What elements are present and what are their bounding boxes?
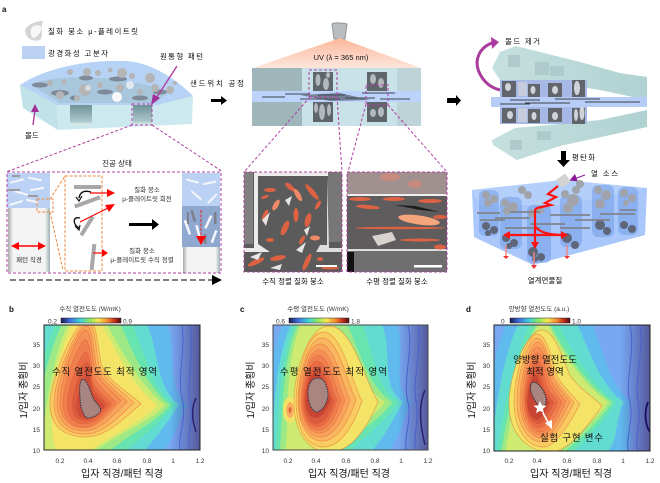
y ticks d: 15	[483, 427, 490, 434]
colorbar c: 1.8	[351, 318, 360, 326]
colorbar c: 수평 열전도도 (W/mK)	[287, 304, 349, 313]
colorbar c	[276, 304, 360, 326]
mold label: 몰드	[25, 131, 39, 140]
arrow: mold	[31, 104, 39, 125]
mold with polymer and particles	[20, 61, 193, 130]
contour map c	[272, 324, 428, 450]
sandwich label: 샌드위치 공정	[190, 78, 244, 88]
optimal region label b: 수직 열전도도 최적 영역	[52, 366, 157, 378]
x axis title d: 입자 직경/패턴 직경	[530, 467, 612, 480]
x ticks d: 1.2	[645, 458, 655, 465]
x ticks b: 1	[171, 458, 175, 465]
arrow: step one	[211, 96, 227, 105]
y ticks d	[483, 342, 490, 455]
panel label b: b	[9, 305, 14, 314]
y ticks b: 30	[33, 363, 40, 370]
pattern diameter arrow	[11, 242, 46, 250]
pattern highlight boxes	[309, 70, 388, 105]
rotation text: 질화 붕소	[134, 186, 160, 194]
micrograph: vertical alignment	[244, 172, 342, 272]
panel label d: d	[466, 305, 471, 314]
panel: UV curing sandwich	[252, 23, 421, 126]
x ticks d	[504, 458, 655, 465]
x axis title b: 입자 직경/패턴 직경	[81, 467, 163, 480]
y ticks b	[33, 342, 40, 455]
x ticks c: 1	[399, 458, 403, 465]
colorbar d: 0	[501, 318, 505, 326]
x ticks d: 0.2	[504, 458, 514, 465]
y ticks d: 30	[483, 363, 490, 370]
optimal region label d: 최적 영역	[526, 366, 564, 378]
uv cone	[253, 38, 421, 68]
optimal region label d: 양방향 열전도도	[513, 354, 577, 366]
arrow: flatten	[557, 151, 570, 167]
cylindrical pattern label: 원통형 패턴	[160, 51, 203, 61]
legend: photocurable polymer	[22, 46, 108, 59]
legend: boron nitride platelet	[25, 21, 138, 41]
x ticks b: 0.8	[142, 458, 152, 465]
y ticks c: 10	[262, 448, 269, 455]
legend: photocurable polymer: 광경화성 고분자	[48, 48, 108, 58]
rotation text	[122, 186, 172, 203]
colorbar d: 1.0	[572, 318, 581, 326]
optimal region label c: 수평 열전도도 최적 영역	[280, 366, 387, 378]
colorbar b: 0.9	[123, 318, 132, 326]
micrograph caption right: 수평 정렬 질화 붕소	[366, 276, 428, 286]
y ticks b: 20	[33, 406, 40, 413]
arrow: to pattern	[151, 66, 177, 105]
heat source block	[556, 173, 571, 188]
contour map d	[494, 324, 650, 452]
x ticks b: 0.2	[55, 458, 65, 465]
rotation text: μ-플레이트릿 회전	[122, 194, 172, 203]
y ticks d: 10	[483, 448, 490, 455]
y ticks b: 15	[33, 427, 40, 434]
red dashed down arrow	[196, 210, 206, 245]
optimal region label d	[513, 354, 577, 378]
x ticks c: 0.2	[283, 458, 293, 465]
y ticks b: 25	[33, 384, 40, 391]
x ticks d: 0.8	[592, 458, 602, 465]
y ticks b: 35	[33, 342, 40, 349]
heat flow red arrows	[505, 186, 565, 245]
heat source label: 열 소스	[591, 169, 618, 178]
colorbar d	[501, 304, 581, 326]
heat arrowheads	[503, 231, 568, 249]
y ticks c: 35	[262, 342, 269, 349]
colorbar c: 0.6	[276, 318, 285, 326]
contour map b	[44, 324, 200, 450]
panel: demolded stack	[491, 46, 647, 160]
mold removal label: 몰드 제거	[505, 37, 540, 46]
zoom lines to micrographs	[244, 97, 447, 172]
alignment text: 질화 붕소	[129, 247, 155, 255]
arrow: mold removal	[477, 37, 500, 90]
platelets	[74, 185, 101, 270]
y axis title c: 1/입자 종횡비	[244, 361, 257, 419]
arrow: experimental point	[543, 413, 552, 429]
panel label a: a	[2, 5, 7, 14]
vacuum label: 진공 상태	[102, 158, 132, 168]
TIM label: 열계면물질	[528, 275, 562, 285]
heat transfer down arrows	[503, 245, 570, 269]
y ticks d: 25	[483, 384, 490, 391]
mold block	[252, 68, 421, 126]
alignment text	[110, 247, 174, 264]
panel label c: c	[240, 305, 245, 314]
y ticks c: 15	[262, 427, 269, 434]
colorbar b	[48, 304, 132, 326]
x ticks c: 0.6	[341, 458, 351, 465]
panel: thermal interface material	[472, 173, 647, 269]
arrow: heat source	[569, 174, 585, 182]
micrograph: horizontal alignment	[347, 172, 447, 272]
colorbar b: 0.2	[48, 318, 57, 326]
x ticks c: 1.2	[423, 458, 433, 465]
alignment text: μ-플레이트릿 수직 정렬	[110, 255, 174, 264]
orange zoom boxes	[37, 176, 102, 271]
y ticks d: 35	[483, 342, 490, 349]
uv label: UV (λ = 365 nm)	[314, 53, 369, 62]
y axis title b: 1/입자 종횡비	[17, 361, 30, 419]
y ticks d: 20	[483, 406, 490, 413]
x ticks c: 0.8	[370, 458, 380, 465]
experimental label: 실험 구현 변수	[540, 433, 603, 444]
y ticks c: 30	[262, 363, 269, 370]
star marker	[534, 401, 546, 413]
x ticks b: 1.2	[195, 458, 205, 465]
rotation arrows	[74, 191, 91, 230]
colorbar d: 양방향 열전도도 (a.u.)	[509, 304, 569, 313]
micrograph caption left: 수직 정렬 질화 붕소	[262, 276, 324, 286]
panel: vacuum process	[7, 172, 221, 273]
y ticks c: 20	[262, 406, 269, 413]
y axis title d: 1/입자 종횡비	[465, 361, 478, 419]
black arrow	[129, 219, 159, 230]
x ticks b: 0.6	[112, 458, 122, 465]
x ticks b: 0.4	[83, 458, 93, 465]
y ticks b: 10	[33, 448, 40, 455]
red arrows	[80, 189, 115, 257]
uv lamp	[332, 23, 347, 39]
legend: boron nitride platelet: 질화 붕소 μ-플레이트릿	[48, 26, 138, 36]
x ticks c	[283, 458, 433, 465]
arrow: step two	[447, 95, 461, 106]
y ticks c	[262, 342, 269, 455]
x ticks b	[55, 458, 205, 465]
x ticks d: 1	[621, 458, 625, 465]
x ticks c: 0.4	[311, 458, 321, 465]
pattern diameter label: 패턴 직경	[16, 255, 42, 264]
y ticks c: 25	[262, 384, 269, 391]
dashed pattern highlight	[132, 104, 152, 125]
x axis title c: 입자 직경/패턴 직경	[308, 467, 390, 480]
zoom lines	[6, 125, 223, 172]
dashed time arrow	[10, 275, 222, 285]
x ticks d: 0.6	[562, 458, 572, 465]
x ticks d: 0.4	[532, 458, 542, 465]
flatten label: 평탄화	[572, 152, 595, 162]
colorbar b: 수직 열전도도 (W/mK)	[59, 304, 121, 313]
